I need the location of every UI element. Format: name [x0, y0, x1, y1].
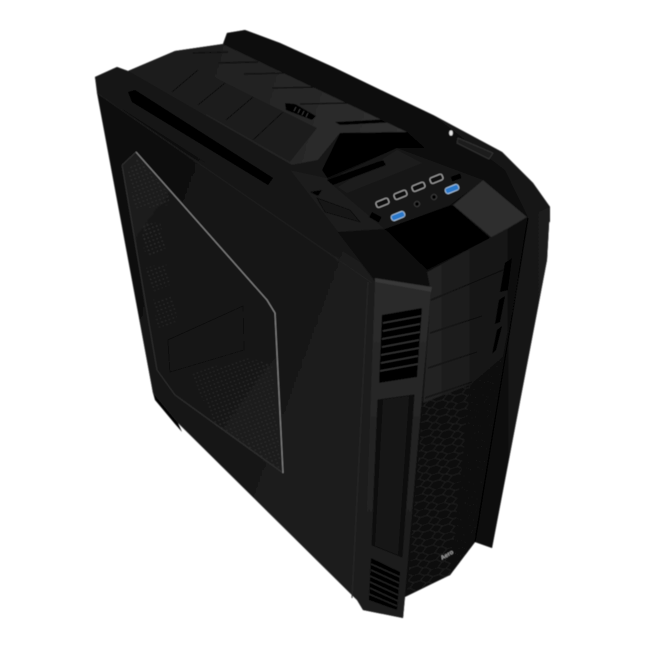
audio jacks [414, 194, 437, 207]
foot: bottom edge [153, 393, 182, 432]
window interior: perforated tray [190, 358, 281, 470]
fan switches [369, 173, 462, 222]
panel: top lid [128, 44, 407, 165]
panel: I/O port panel [327, 148, 483, 229]
window frame highlight [122, 152, 283, 473]
lower vent [369, 558, 400, 610]
logo: Aero [440, 550, 455, 562]
panel: front bezel [352, 278, 432, 618]
case body [95, 30, 550, 618]
case silhouette [95, 30, 550, 618]
panel: right side strip [475, 207, 550, 548]
top strip [223, 30, 550, 222]
small front panel left of ports [317, 198, 360, 222]
window interior: fan mounting holes [128, 158, 178, 328]
upper vent [379, 308, 422, 383]
blue USB 3 ports [390, 184, 460, 221]
side panel top band [95, 67, 375, 282]
shoulder wedges [453, 180, 527, 238]
rear slots [492, 258, 512, 354]
panel: honeycomb mesh [407, 357, 503, 595]
drive dock tray [327, 150, 422, 193]
power button strip [449, 130, 493, 159]
panel: window [122, 152, 283, 473]
lid panel: row of five sections [148, 58, 317, 162]
panel: front drive bays [423, 218, 527, 403]
power LED [449, 130, 453, 136]
lid grooves [193, 52, 350, 104]
window interior: drive cage [168, 306, 244, 372]
USB ports [375, 174, 444, 208]
mesh insert [372, 395, 414, 557]
black wedge under lid [303, 132, 425, 178]
handle slot [128, 90, 273, 185]
lid latch [285, 103, 316, 120]
panel: side panel [97, 93, 375, 610]
